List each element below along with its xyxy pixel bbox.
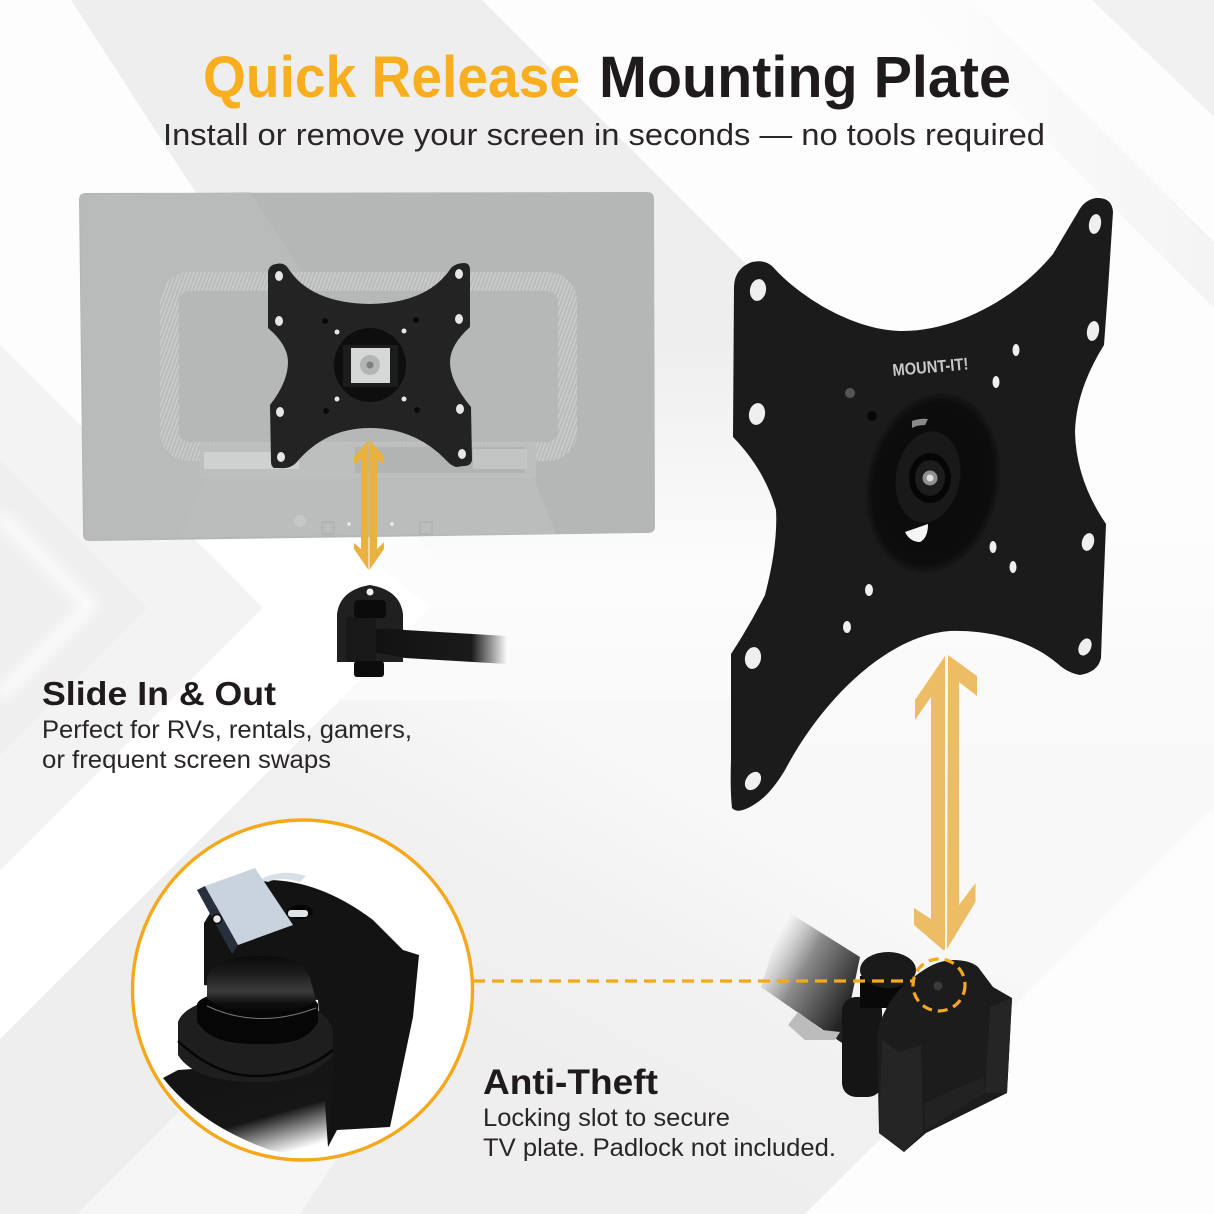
text: slide in and out description: or frequent screen swaps	[42, 746, 331, 774]
title	[203, 45, 1011, 110]
text: slide in and out description: Perfect for RVs, rentals, gamers,	[42, 716, 412, 744]
mount bracket with arm	[337, 585, 507, 677]
arm body	[163, 1050, 335, 1153]
text: slide in and out description	[42, 716, 412, 774]
title: Quick Release	[203, 45, 580, 110]
zoom circle ring	[132, 820, 472, 1160]
small mounting plate	[268, 263, 472, 468]
arrow: small slide up and down	[354, 440, 384, 570]
text: anti-theft description	[483, 1104, 836, 1162]
text: anti-theft description: Locking slot to secure	[483, 1104, 730, 1132]
large mounting plate	[731, 198, 1113, 811]
lower mount bracket	[761, 910, 1012, 1152]
padlock	[197, 886, 238, 954]
arrow: large slide up and down	[914, 655, 977, 950]
heading: slide in and out: Slide In & Out	[42, 675, 276, 712]
zoom circle with lock detail	[132, 820, 472, 1160]
knob dome	[207, 956, 316, 1013]
text: anti-theft description: TV plate. Padlock not included.	[483, 1134, 836, 1162]
logo text: MOUNT-IT!	[892, 354, 969, 380]
subtitle: Install or remove your screen in seconds — no tools required	[163, 117, 1045, 152]
padlock shackle	[260, 873, 306, 882]
monitor rear panel	[79, 192, 655, 541]
heading: anti-theft: Anti-Theft	[483, 1063, 658, 1102]
lock bracket plate	[204, 880, 419, 1147]
front plate	[877, 960, 1012, 1152]
title: Mounting Plate	[599, 45, 1011, 110]
locking slot dashed callout	[473, 959, 965, 1011]
